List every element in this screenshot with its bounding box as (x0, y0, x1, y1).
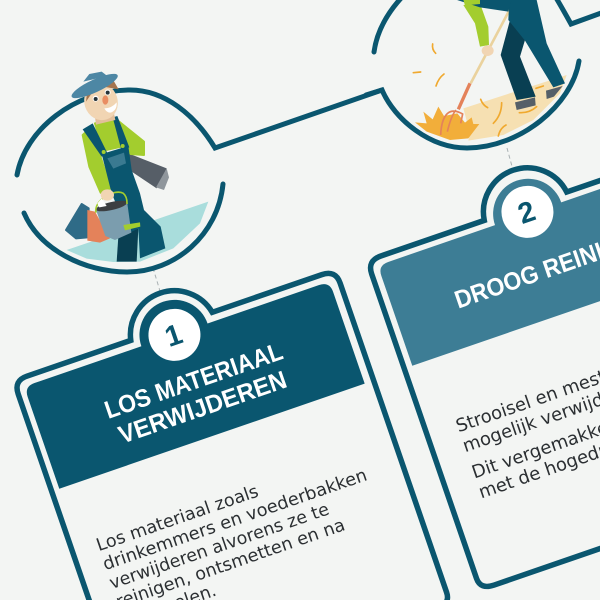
card body text: Los materiaal zoals (94, 482, 261, 556)
back leg (501, 20, 536, 100)
bucket (95, 192, 140, 240)
ground patch (67, 202, 208, 262)
card title: VERWIJDEREN (115, 366, 290, 450)
arm (463, 3, 489, 47)
shoes (515, 97, 536, 110)
card outline (355, 114, 600, 590)
front leg (508, 0, 565, 87)
connector: dashed line to card 2 (507, 148, 513, 170)
rake handle (471, 0, 516, 83)
overall straps (83, 123, 108, 157)
back leg (117, 228, 138, 262)
number badge: 2 (514, 195, 540, 231)
panel: card 2 (355, 114, 600, 590)
hand (101, 189, 114, 201)
metal beam (128, 153, 169, 190)
card body text: drinkemmers en voederbakken (100, 466, 370, 575)
sand ground (463, 75, 567, 141)
bib pocket (107, 153, 126, 169)
orange bag (87, 210, 110, 243)
card outline (2, 237, 450, 600)
card header band (13, 248, 365, 489)
number badge (141, 302, 207, 368)
shirt (83, 118, 144, 193)
illustration: farmer raking straw (413, 0, 567, 141)
torso (455, 0, 512, 12)
timeline: circle outlines and connecting line (17, 0, 600, 272)
falling leaves (413, 44, 543, 136)
overalls (102, 146, 165, 258)
card body text: verwijderen alvorens ze te (107, 500, 332, 594)
hand (482, 45, 494, 56)
card title: LOS MATERIAAL (101, 338, 286, 425)
rake head (441, 83, 470, 135)
number badge: 1 (161, 318, 187, 354)
connector: dashed line to card 1 (153, 268, 160, 291)
panel: card 1 (2, 237, 450, 600)
straw pile (415, 107, 479, 140)
card header band (366, 127, 600, 366)
dark blue bag (66, 204, 89, 238)
number badge (494, 179, 560, 245)
illustration: farmer carrying material (66, 70, 208, 262)
head (69, 70, 123, 125)
